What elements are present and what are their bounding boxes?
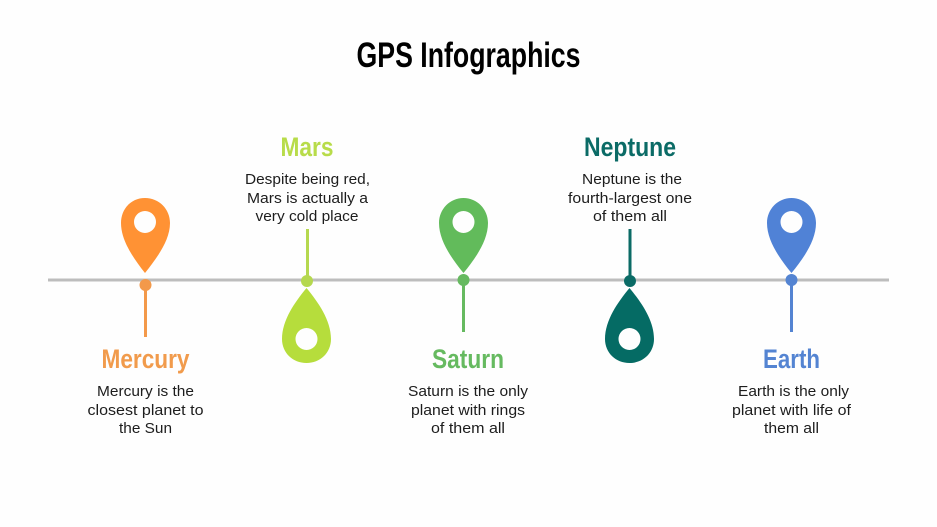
Mercury text: the Sun <box>119 420 172 437</box>
Earth heading: Earth <box>763 344 820 374</box>
Mercury text: Mercury is the <box>97 383 194 400</box>
panel: Neptune <box>568 132 692 363</box>
timeline axis <box>48 278 889 282</box>
icon: Saturn pin <box>439 198 488 273</box>
Mercury text <box>88 383 204 437</box>
icon: Mars drop <box>282 288 331 363</box>
Mars stem and dot <box>301 229 313 287</box>
Saturn text: planet with rings <box>411 402 525 419</box>
Mars text: Despite being red, <box>245 171 370 188</box>
icon: Mercury pin <box>121 198 170 273</box>
Earth text <box>732 383 852 437</box>
panel: Mercury <box>88 198 204 437</box>
Mars text: Mars is actually a <box>247 190 369 207</box>
Neptune text <box>568 171 692 225</box>
Mercury text: closest planet to <box>88 402 204 419</box>
Saturn stem and dot <box>458 274 470 332</box>
Neptune text: of them all <box>593 208 667 225</box>
Earth stem and dot <box>786 274 798 332</box>
Neptune text: fourth-largest one <box>568 190 692 207</box>
Saturn heading: Saturn <box>432 344 504 374</box>
Earth text: Earth is the only <box>738 383 850 400</box>
Neptune text: Neptune is the <box>582 171 682 188</box>
Neptune heading: Neptune <box>584 132 676 162</box>
panel: Earth <box>732 198 852 437</box>
title: GPS Infographics <box>356 36 580 75</box>
Mars text <box>245 171 370 225</box>
Earth text: them all <box>764 420 819 437</box>
Earth text: planet with life of <box>732 402 852 419</box>
Mars text: very cold place <box>256 208 358 225</box>
panel: Saturn <box>408 198 529 437</box>
Mercury heading: Mercury <box>102 344 190 374</box>
panel: Mars <box>245 132 370 363</box>
Mars heading: Mars <box>280 132 334 162</box>
Saturn text <box>408 383 529 437</box>
Neptune stem and dot <box>624 229 636 287</box>
Saturn text: Saturn is the only <box>408 383 529 400</box>
icon: Neptune drop <box>605 288 654 363</box>
Saturn text: of them all <box>431 420 505 437</box>
icon: Earth pin <box>767 198 816 273</box>
Mercury stem and dot <box>140 279 152 337</box>
